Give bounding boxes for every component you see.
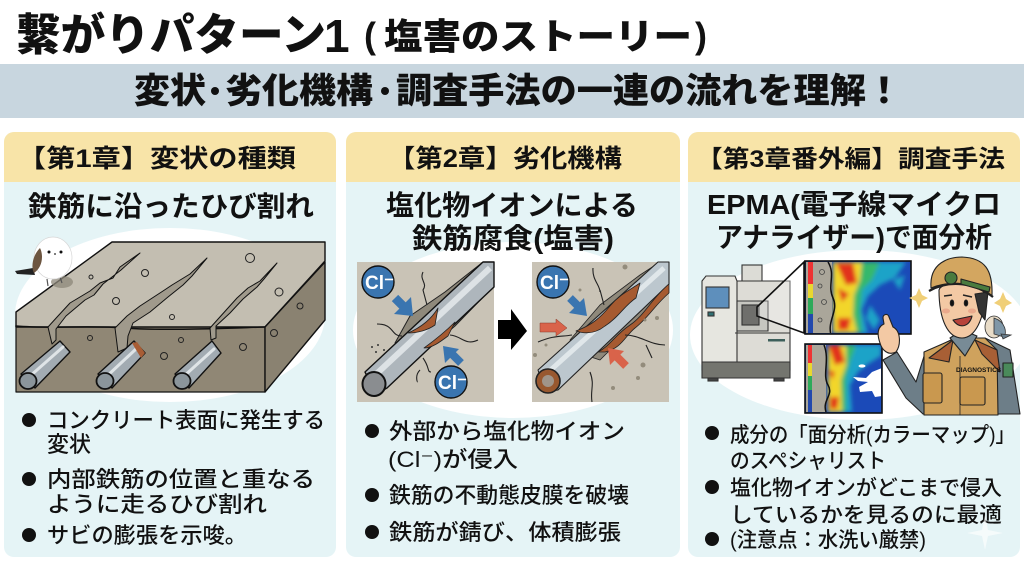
chapter 2 heading: 塩化物イオンによる xyxy=(386,190,638,221)
banner: subtitle: 劣化機構 xyxy=(225,72,373,111)
arrow: red left xyxy=(540,319,567,336)
illustration: cracked concrete slab xyxy=(16,242,325,392)
panel: chapter 2 xyxy=(346,132,680,557)
chapter 3 bullets xyxy=(705,424,1015,552)
icon: white bird xyxy=(15,237,73,288)
chart: colour map lower xyxy=(805,344,882,413)
title: ( xyxy=(364,15,376,56)
chapter 1 bullets: ように走るひび割れ xyxy=(47,492,267,517)
illustration: chloride attack before xyxy=(357,262,494,402)
icon: Cl ion: Cl⁻ xyxy=(365,273,394,294)
illustration: EPMA machine xyxy=(702,262,804,381)
banner: subtitle: 調査手法の一連の流れを理解！ xyxy=(396,72,902,111)
title xyxy=(16,10,707,62)
icon: faint sparkle xyxy=(967,515,1003,550)
chapter 3 bullets: (注意点：水洗い厳禁) xyxy=(730,529,926,552)
chapter 3 heading: アナライザー)で面分析 xyxy=(716,222,992,253)
icon: Cl ion: Cl⁻ xyxy=(438,373,467,394)
illustration: chloride attack after xyxy=(532,262,669,402)
chapter 1 bullets: 変状 xyxy=(47,432,91,457)
chapter 3 bullets: のスペシャリスト xyxy=(730,450,886,473)
illustration: engineer xyxy=(878,257,1020,415)
chapter 2 heading: 鉄筋腐食(塩害) xyxy=(412,223,614,254)
title: ) xyxy=(695,15,707,56)
banner: subtitle xyxy=(0,64,1024,118)
chapter 3 header: 【第3章番外編】調査手法 xyxy=(696,146,1005,173)
chapter 3 heading xyxy=(707,189,1001,253)
chapter 1 bullets xyxy=(22,408,325,548)
chapter 1 header xyxy=(4,132,336,182)
chapter 2 header xyxy=(346,132,680,182)
rebars xyxy=(20,341,221,389)
chapter 1 header: 【第1章】変状の種類 xyxy=(17,145,296,173)
icons: sparkles xyxy=(909,288,1012,313)
icon: small parrot xyxy=(985,316,1011,339)
chapter 3 header xyxy=(688,132,1020,182)
chapter 3 bullets: しているかを見るのに最適 xyxy=(730,504,1002,527)
title: 1 xyxy=(324,10,350,62)
chapter 1 bullets: 内部鉄筋の位置と重なる xyxy=(47,467,315,492)
chart: colour map upper xyxy=(805,261,911,335)
arrow: red lower xyxy=(608,348,626,366)
illustration: engineer: DIAGNOSTICS xyxy=(956,367,1002,374)
title: 繋がりパターン xyxy=(16,10,326,60)
arrow: blue xyxy=(443,346,461,363)
icon: Cl ion: Cl⁻ xyxy=(540,273,569,294)
cracks xyxy=(48,253,277,352)
panel: chapter 1 xyxy=(4,132,336,557)
chapter 2 bullets xyxy=(365,419,629,545)
chapter 3 heading: EPMA(電子線マイクロ xyxy=(707,189,1001,220)
chapter 1 bullets: サビの膨張を示唆。 xyxy=(47,523,247,548)
chapter 2 header: 【第2章】劣化機構 xyxy=(388,145,622,173)
chapter 2 bullets: 鉄筋が錆び、体積膨張 xyxy=(389,520,621,545)
chapter 2 bullets: 鉄筋の不動態皮膜を破壊 xyxy=(389,483,629,508)
banner: subtitle: 変状 xyxy=(134,72,206,111)
chapter 1 bullets: コンクリート表面に発生する xyxy=(47,408,325,433)
chapter 2 bullets: (Cl⁻)が侵入 xyxy=(388,447,518,472)
panel: chapter 3 xyxy=(688,132,1024,557)
chapter 3 bullets: 塩化物イオンがどこまで侵入 xyxy=(730,477,1002,500)
arrow: blue xyxy=(569,298,587,316)
chapter 2 heading xyxy=(386,190,638,254)
chapter 2 bullets: 外部から塩化物イオン xyxy=(389,419,625,444)
arrow: process xyxy=(498,309,527,350)
arrow: blue xyxy=(394,297,413,316)
chapter 1 heading: 鉄筋に沿ったひび割れ xyxy=(28,191,314,222)
title: 塩害のストーリー xyxy=(384,16,692,57)
